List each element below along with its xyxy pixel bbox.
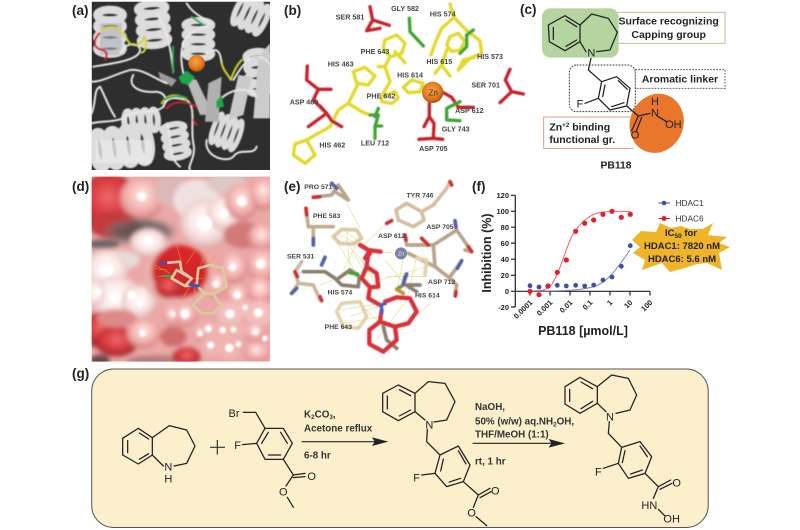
product PB118 <box>565 375 672 516</box>
reagent atoms: O <box>307 471 316 483</box>
reagent atoms: O <box>279 487 288 499</box>
HDAC1 points <box>528 243 633 289</box>
conditions 2: NaOH, <box>475 402 505 413</box>
x axis title: PB118 [µmol/L] <box>538 324 628 338</box>
conditions 2: 2 <box>553 421 557 428</box>
icon: orange zinc sphere <box>188 55 205 72</box>
panel f: dose response chart <box>480 191 730 338</box>
legend: HDAC1 <box>676 198 704 208</box>
residue labels: HIS 573 <box>477 53 503 61</box>
residue labels: ASP 712 <box>428 279 455 286</box>
bromo fluoro benzoate <box>242 412 305 507</box>
atom labels: O <box>631 130 640 142</box>
loops <box>92 3 270 170</box>
capping group callout: Surface recognizing <box>619 17 719 28</box>
surface spheres <box>92 176 130 224</box>
reactants and first arrow <box>123 408 388 507</box>
IC50 starburst callout: 50 <box>674 233 682 240</box>
residue labels: PHE 642 <box>367 92 395 100</box>
residue labels: TYR 746 <box>407 192 434 199</box>
panel g: synthesis scheme <box>92 369 708 528</box>
x tick labels <box>512 298 654 321</box>
aromatic linker callout: Aromatic linker <box>642 75 718 86</box>
product atoms <box>595 412 681 525</box>
panel label d: (d) <box>72 179 89 194</box>
helix: bottom right <box>209 114 244 150</box>
residue labels: PHE 583 <box>313 213 341 220</box>
residue labels <box>290 5 503 153</box>
orange zinc binding highlight <box>621 86 693 161</box>
green capping group highlight <box>542 8 619 58</box>
benzazepine NH: H <box>164 473 172 485</box>
product atoms: F <box>595 467 602 479</box>
conditions 1 <box>304 409 373 461</box>
panel c: PB118 pharmacophore <box>542 8 725 172</box>
IC50 starburst callout: HDAC6: 5.6 nM <box>648 254 716 265</box>
legend: HDAC6 <box>676 214 704 224</box>
conditions 2: 50% (w/w) aq.NH <box>475 417 553 428</box>
x tick labels: 100 <box>639 298 654 313</box>
HDAC6 points <box>527 209 633 297</box>
atom labels <box>577 48 682 142</box>
x tick labels: 0.1 <box>581 298 594 312</box>
conditions 1: K <box>304 409 311 420</box>
residue labels: ASP 612 <box>378 233 405 240</box>
conditions 2: OH, <box>557 417 574 428</box>
residue labels: HIS 615 <box>426 58 452 66</box>
plus sign <box>210 440 225 455</box>
product atoms: HN <box>641 500 657 512</box>
panel a: protein ribbon structure <box>91 0 271 170</box>
panel label f: (f) <box>472 179 486 194</box>
intermediate ester <box>383 382 491 526</box>
Zn label: Zn <box>429 88 438 97</box>
helix: top right <box>231 0 271 34</box>
atom labels: H <box>651 96 659 108</box>
residue labels: ASP 460 <box>290 99 318 107</box>
conditions 1: 2 <box>311 414 315 421</box>
conditions 1: 6-8 hr <box>304 450 331 461</box>
residue labels: LEU 712 <box>361 140 389 148</box>
residue labels: HIS 462 <box>319 141 345 149</box>
intermediate atoms: O <box>467 508 476 520</box>
intermediate atoms: N <box>425 419 433 431</box>
conditions 2 <box>475 402 574 467</box>
helix: right <box>245 51 271 95</box>
helix: bottom centre <box>162 122 190 159</box>
y tick labels: 20 <box>501 271 509 280</box>
panel label c: (c) <box>520 2 536 17</box>
green residue sticks <box>370 18 473 138</box>
Zn text: Zn <box>398 252 404 258</box>
helix: top left <box>97 10 123 54</box>
helix: bottom left large <box>91 126 152 168</box>
conditions 1: , <box>333 409 336 420</box>
IC50 starburst callout: IC <box>665 228 674 239</box>
yellow residue sticks <box>293 4 482 163</box>
dashed linker outline <box>569 65 635 112</box>
benzazepine NH: N <box>164 462 172 474</box>
conditions 2: rt, 1 hr <box>475 456 506 467</box>
coloured residue loops <box>95 17 242 125</box>
reaction arrow 2 <box>473 439 565 448</box>
atom labels: N <box>587 48 595 60</box>
residue labels: HIS 614 <box>415 292 440 299</box>
x tick labels: 10 <box>622 298 634 310</box>
reagent atoms: Br <box>229 408 240 420</box>
ligand red sticks <box>360 245 417 352</box>
green arrowheads <box>178 71 195 85</box>
x tick labels: 0.0001 <box>512 298 534 321</box>
legend <box>658 198 704 224</box>
y tick labels: 120 <box>496 191 509 200</box>
residue labels: GLY 582 <box>391 5 419 13</box>
interaction lines <box>320 203 430 340</box>
y tick labels: -20 <box>498 303 509 312</box>
y tick labels: 0 <box>505 287 509 296</box>
ligand sticks <box>160 262 227 313</box>
icon: zinc sphere <box>422 82 443 103</box>
product atoms: O <box>672 478 681 490</box>
y tick labels: 60 <box>501 239 509 248</box>
residue labels: HIS 574 <box>430 10 456 18</box>
panel label a: (a) <box>72 3 88 18</box>
helix: centre <box>185 20 212 58</box>
scheme background <box>92 369 708 528</box>
atom labels: N <box>651 108 659 120</box>
intermediate and second arrow <box>383 375 681 526</box>
axes <box>511 195 650 307</box>
residue labels: HIS 574 <box>328 290 353 297</box>
product atoms: N <box>606 412 614 424</box>
red residue sticks <box>307 7 523 139</box>
PB118 structure <box>548 14 667 132</box>
zinc binding callout: functional gr. <box>549 135 615 146</box>
benzazepine NH <box>164 462 172 485</box>
helix: bottom middle <box>124 109 159 132</box>
fit curves <box>530 211 630 291</box>
residue labels: PHE 643 <box>361 48 389 56</box>
panel b: binding site residues <box>290 4 523 163</box>
y tick labels: 80 <box>501 223 509 232</box>
product atoms: OH <box>663 513 680 525</box>
panel label e: (e) <box>284 179 300 194</box>
reagent atoms <box>229 408 316 499</box>
aromatic linker callout <box>635 70 725 88</box>
intermediate atoms: F <box>413 473 420 485</box>
panel label b: (b) <box>284 3 301 18</box>
IC50 starburst callout <box>632 223 730 272</box>
conditions 1: Acetone reflux <box>304 423 373 434</box>
conditions 1: 3 <box>329 414 333 421</box>
zinc binding callout: binding <box>569 123 610 134</box>
residue labels: ASP 705 <box>426 224 454 231</box>
residue labels <box>287 184 455 331</box>
panel label g: (g) <box>72 366 89 381</box>
zinc sphere <box>395 247 407 259</box>
x tick labels: 1 <box>605 298 614 307</box>
residue labels: SER 581 <box>336 14 364 22</box>
atom labels: OH <box>665 119 682 131</box>
helix: top middle <box>137 2 169 46</box>
y axis title: Inhibition (%) <box>480 213 494 293</box>
nitrogen on ligand <box>380 303 387 315</box>
residue labels: ASP 705 <box>419 145 448 153</box>
residue labels: HIS 463 <box>328 60 354 68</box>
ligand contact lines <box>153 245 217 298</box>
atom labels: F <box>577 99 584 111</box>
panel d: electrostatic surface <box>92 176 270 362</box>
y tick labels <box>496 191 509 312</box>
capping group callout: Capping group <box>631 30 706 41</box>
binding pocket <box>147 254 212 303</box>
compound name: PB118 <box>600 161 632 172</box>
tan residue sticks <box>292 182 472 348</box>
residue labels: HIS 614 <box>397 71 423 79</box>
y tick labels: 40 <box>501 255 509 264</box>
residue labels: ASP 612 <box>455 107 484 115</box>
panel e: docking pose <box>287 182 472 352</box>
benzazepine <box>123 426 195 466</box>
heteroatom tips <box>292 182 472 301</box>
conditions 1: CO <box>315 409 330 420</box>
zinc binding callout <box>544 117 633 148</box>
x tick labels: 0.01 <box>558 298 574 315</box>
residue labels: PRO 571 <box>304 184 333 191</box>
IC50 starburst callout: for <box>682 228 697 239</box>
capping group callout <box>617 12 725 43</box>
conditions 2: THF/MeOH (1:1) <box>475 430 549 441</box>
x tick labels: 0.001 <box>535 298 554 318</box>
specular highlights <box>95 192 268 352</box>
IC50 starburst callout: HDAC1: 7820 nM <box>644 241 720 252</box>
residue labels: SER 531 <box>287 253 315 260</box>
residue labels: SER 701 <box>471 81 500 89</box>
reagent atoms: F <box>234 440 241 452</box>
residue labels: GLY 743 <box>442 125 470 133</box>
residue labels: PHE 643 <box>325 324 352 331</box>
beta sheets <box>158 43 270 122</box>
intermediate atoms: O <box>491 486 500 498</box>
reaction arrow 1 <box>302 437 388 446</box>
intermediate atoms <box>413 419 500 520</box>
y tick labels: 100 <box>496 207 509 216</box>
zinc binding callout: +2 <box>562 122 570 129</box>
zinc binding callout: Zn <box>549 123 562 134</box>
